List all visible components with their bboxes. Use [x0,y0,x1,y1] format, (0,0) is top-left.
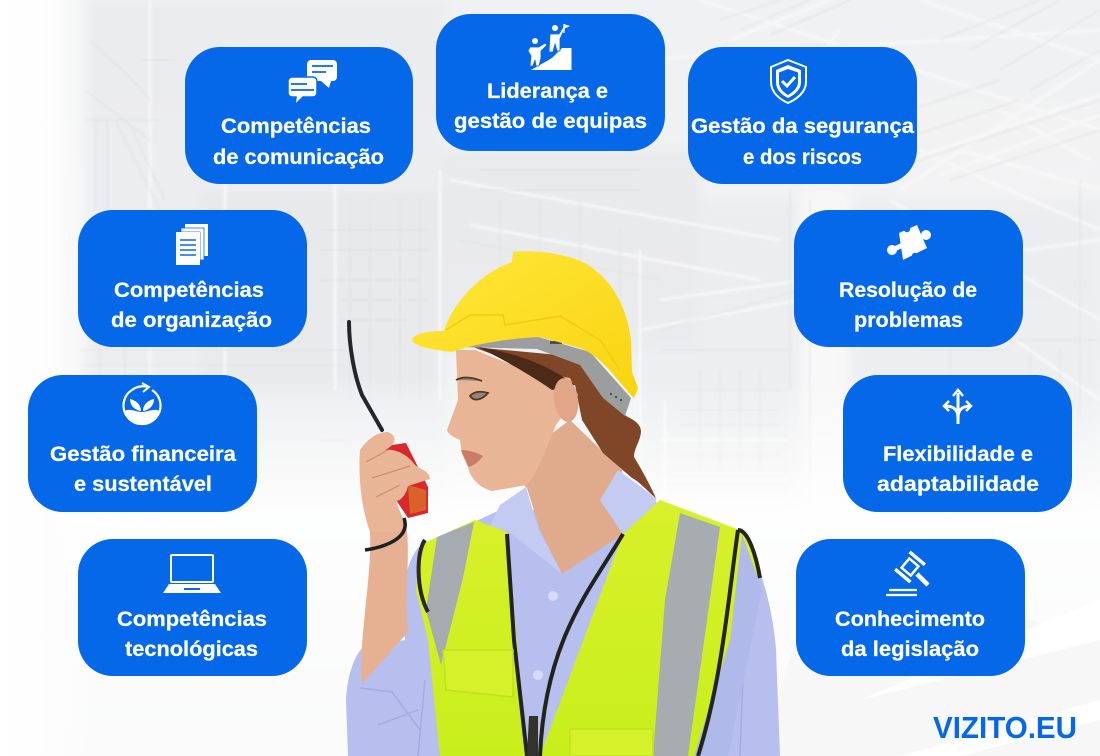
right collar [600,470,662,553]
text [454,80,647,133]
icon: laptop [163,555,221,593]
vest pockets [443,650,653,756]
text: da legislação [841,638,979,661]
text [117,608,267,661]
worker with hard hat, radio and safety vest [346,251,780,756]
card: liderança [436,14,665,151]
text [877,443,1039,496]
sleeve folds [360,620,745,756]
card: comunicação [185,47,413,184]
left collar [477,487,562,574]
right reflective strip [653,513,720,756]
icon: puzzle piece [887,225,931,260]
text [839,279,977,332]
text: gestão de equipas [454,110,647,133]
raised forearm [361,532,408,684]
text: Gestão da segurança [691,115,914,138]
yellow hard hat [412,251,638,398]
finger lines [366,450,410,497]
card: legislação [796,539,1025,676]
grey helmet harness [450,336,631,416]
right vest panel [540,500,758,756]
zipper [527,716,538,756]
text: Resolução de [839,279,977,302]
text: Competências [117,608,267,631]
text: problemas [854,309,963,332]
neck and chest skin [505,420,623,574]
braid and hair mass [473,347,656,498]
card: gestão financeira [28,375,257,512]
text [835,608,985,661]
text: Gestão financeira [50,443,236,466]
face [447,350,578,491]
wrist strap [365,518,405,550]
left reflective strip [426,522,474,665]
icon: shield with check [771,60,806,103]
lips [461,450,483,466]
text: Flexibilidade e [883,443,1033,466]
hard hat rim band [446,315,620,370]
text: de organização [111,309,272,332]
card: flexibilidade [843,375,1072,512]
shirt buttons [533,591,558,680]
text [691,115,914,169]
eye and brow [456,377,488,400]
radio detail [408,485,426,514]
text: Competências [114,279,264,302]
radio antenna [349,322,382,430]
icon: stacked documents [176,224,208,265]
left vest panel [416,520,527,756]
shirt torso and sleeves [346,510,780,756]
icon: speech bubbles [288,60,337,105]
icon: climbers and flag [528,24,572,70]
brand logo text: VIZITO.EU [933,710,1077,745]
text: Liderança e [487,80,608,103]
left armhole binding [419,540,428,612]
text [50,443,236,496]
text: tecnológicas [125,638,258,661]
text: adaptabilidade [877,473,1039,496]
right armhole binding [698,530,760,756]
card: segurança [688,47,917,184]
card: resolução [794,210,1023,347]
icon: plant in cycle [124,383,160,425]
text: e dos riscos [743,146,862,169]
red radio [378,443,428,518]
hand gripping radio [359,432,430,532]
text [213,115,384,169]
ear [551,377,581,423]
card: tecnológicas [78,539,307,676]
shirt under right armhole [694,534,762,756]
placket binding [507,534,623,756]
text: Conhecimento [835,608,985,631]
text [111,279,272,332]
text: de comunicação [213,146,384,169]
text: Competências [221,115,371,138]
icon: three-way arrows [944,390,971,424]
text: e sustentável [74,473,212,496]
dark hairline [478,347,575,390]
card: organização [78,210,307,347]
harness holes [550,341,622,401]
icon: gavel [886,551,928,595]
